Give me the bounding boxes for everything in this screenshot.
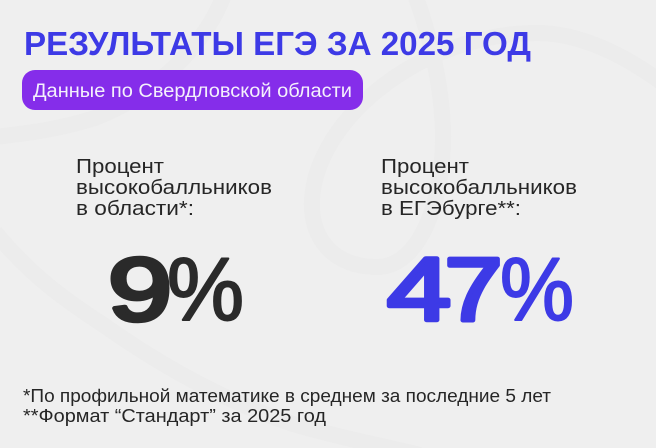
stat: 47%: 4 <box>387 239 451 339</box>
stat: 47% <box>387 239 574 339</box>
stat: 9%: % <box>167 239 244 339</box>
label: region: в области*: <box>76 198 194 220</box>
label: EGEburg <box>381 156 577 220</box>
footnotes: *По профильной математике в среднем за последние 5 лет <box>23 386 551 406</box>
subtitle pill <box>22 70 363 110</box>
label: EGEburg: в ЕГЭбурге**: <box>381 198 521 220</box>
subtitle pill: Данные по Свердловской области <box>33 81 352 102</box>
stat: 47%: % <box>500 239 574 339</box>
label: EGEburg: Процент <box>381 156 469 178</box>
label: region: высокобалльников <box>76 177 272 199</box>
footnotes: **Формат “Стандарт” за 2025 год <box>23 406 327 426</box>
label: region <box>76 156 272 220</box>
label: EGEburg: высокобалльников <box>381 177 577 199</box>
stat: 47%: 7 <box>444 239 502 339</box>
footnotes <box>23 386 551 426</box>
label: region: Процент <box>76 156 164 178</box>
stat: 9%: 9 <box>108 239 172 339</box>
title: РЕЗУЛЬТАТЫ ЕГЭ ЗА 2025 ГОД <box>24 25 531 62</box>
stat: 9% <box>108 239 244 339</box>
